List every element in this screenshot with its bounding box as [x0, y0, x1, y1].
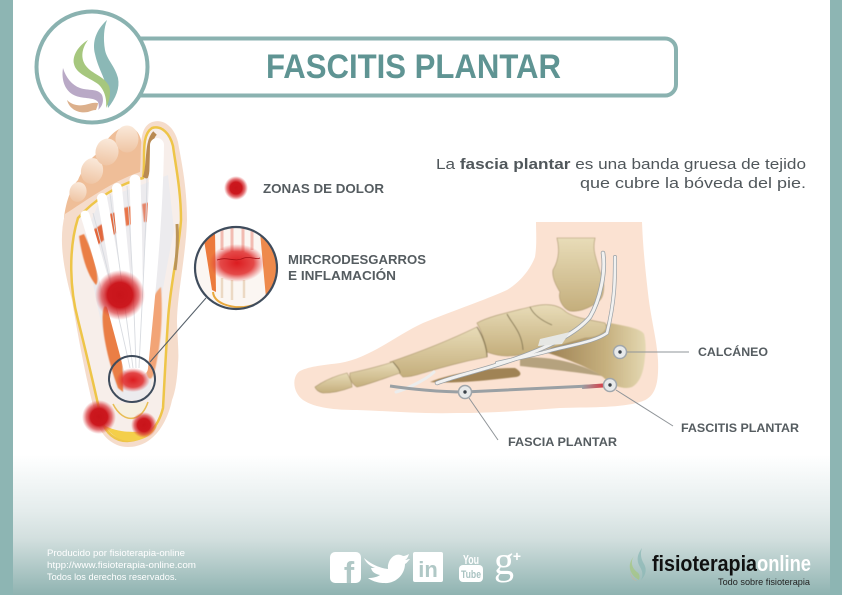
white tendons: [85, 145, 157, 368]
inner shading: [85, 175, 174, 400]
footer credits: Producido por fisioterapia-online: [47, 548, 185, 558]
heel bone: [113, 402, 148, 418]
callout: fascitis plantar: [616, 390, 800, 435]
logo mark: [630, 548, 646, 581]
description text: que cubre la bóveda del pie.: [580, 175, 806, 192]
legend dot: [224, 176, 248, 200]
magnifier inset: [194, 226, 278, 311]
magnified area on foot: [109, 356, 155, 402]
pain spot: left heel: [82, 400, 116, 434]
callout: fascitis plantar: FASCITIS PLANTAR: [681, 423, 800, 435]
title banner: [100, 38, 676, 96]
sole outer skin: [62, 121, 187, 447]
icon: youtube: Tube: [461, 569, 481, 581]
logo badge: [36, 12, 148, 122]
wordmark: fisioterapia: [652, 551, 758, 576]
distal phalanx: [315, 373, 352, 393]
icon: linkedin: in: [418, 557, 438, 582]
callout: fascia plantar: [469, 398, 618, 449]
orange muscles: [79, 200, 162, 392]
icon: youtube: [459, 552, 483, 582]
footer credits: [47, 548, 196, 582]
marker: fasciitis: [604, 378, 616, 392]
icon: twitter: [364, 554, 410, 583]
skin silhouette: [294, 222, 658, 413]
inset label: E INFLAMACIÓN: [288, 268, 396, 283]
toes: [64, 126, 142, 218]
icon: google plus: +: [513, 548, 521, 564]
legend: pain zones: [224, 176, 384, 200]
wordmark: online: [757, 551, 811, 576]
pain spot: right heel: [131, 412, 157, 438]
sole inner area with fat rim: [71, 127, 181, 441]
leader line: [150, 298, 206, 362]
callout: fascia plantar: FASCIA PLANTAR: [508, 437, 618, 449]
sole shadow mass: [520, 357, 602, 376]
title: FASCITIS PLANTAR: [266, 48, 561, 86]
marker: fascia: [458, 386, 472, 398]
big toe brown layer: [145, 133, 155, 178]
inset label: [288, 253, 426, 283]
icon: facebook: f: [344, 555, 355, 590]
marker: calcaneus: [614, 346, 626, 358]
description text: [436, 156, 806, 192]
footer credits: Todos los derechos reservados.: [47, 572, 177, 582]
legend text: ZONAS DE DOLOR: [263, 182, 384, 196]
inset label: MIRCRODESGARROS: [288, 253, 426, 267]
calcaneus: [545, 323, 646, 388]
side view of foot: [294, 222, 658, 413]
icon: google plus: g: [494, 538, 514, 583]
tagline: Todo sobre fisioterapia: [718, 577, 811, 588]
description text: La fascia plantar es una banda gruesa de tejido: [436, 156, 806, 173]
bones: [315, 238, 646, 393]
pain spot: inner heel: [116, 368, 150, 392]
pain spot: metatarsal: [95, 270, 145, 320]
footer credits: htpp://www.fisioterapia-online.com: [47, 560, 196, 570]
heel fat pad: [104, 425, 157, 441]
icon: linkedin: [413, 552, 443, 582]
tibia: [553, 238, 604, 311]
callout: calcáneo: CALCÁNEO: [698, 346, 768, 359]
social icons: [330, 538, 521, 590]
midfoot: [477, 305, 606, 356]
plantar fascia: [390, 385, 610, 392]
footer logo: [630, 548, 811, 588]
first metatarsal: [390, 327, 487, 377]
inflamed section: [582, 385, 610, 387]
foot sole illustration: [62, 121, 206, 447]
icon: youtube: You: [463, 552, 479, 567]
joint lines: [393, 307, 552, 373]
icon: facebook: [330, 552, 361, 590]
tendons: [396, 253, 615, 392]
proximal phalanx: [350, 362, 400, 387]
